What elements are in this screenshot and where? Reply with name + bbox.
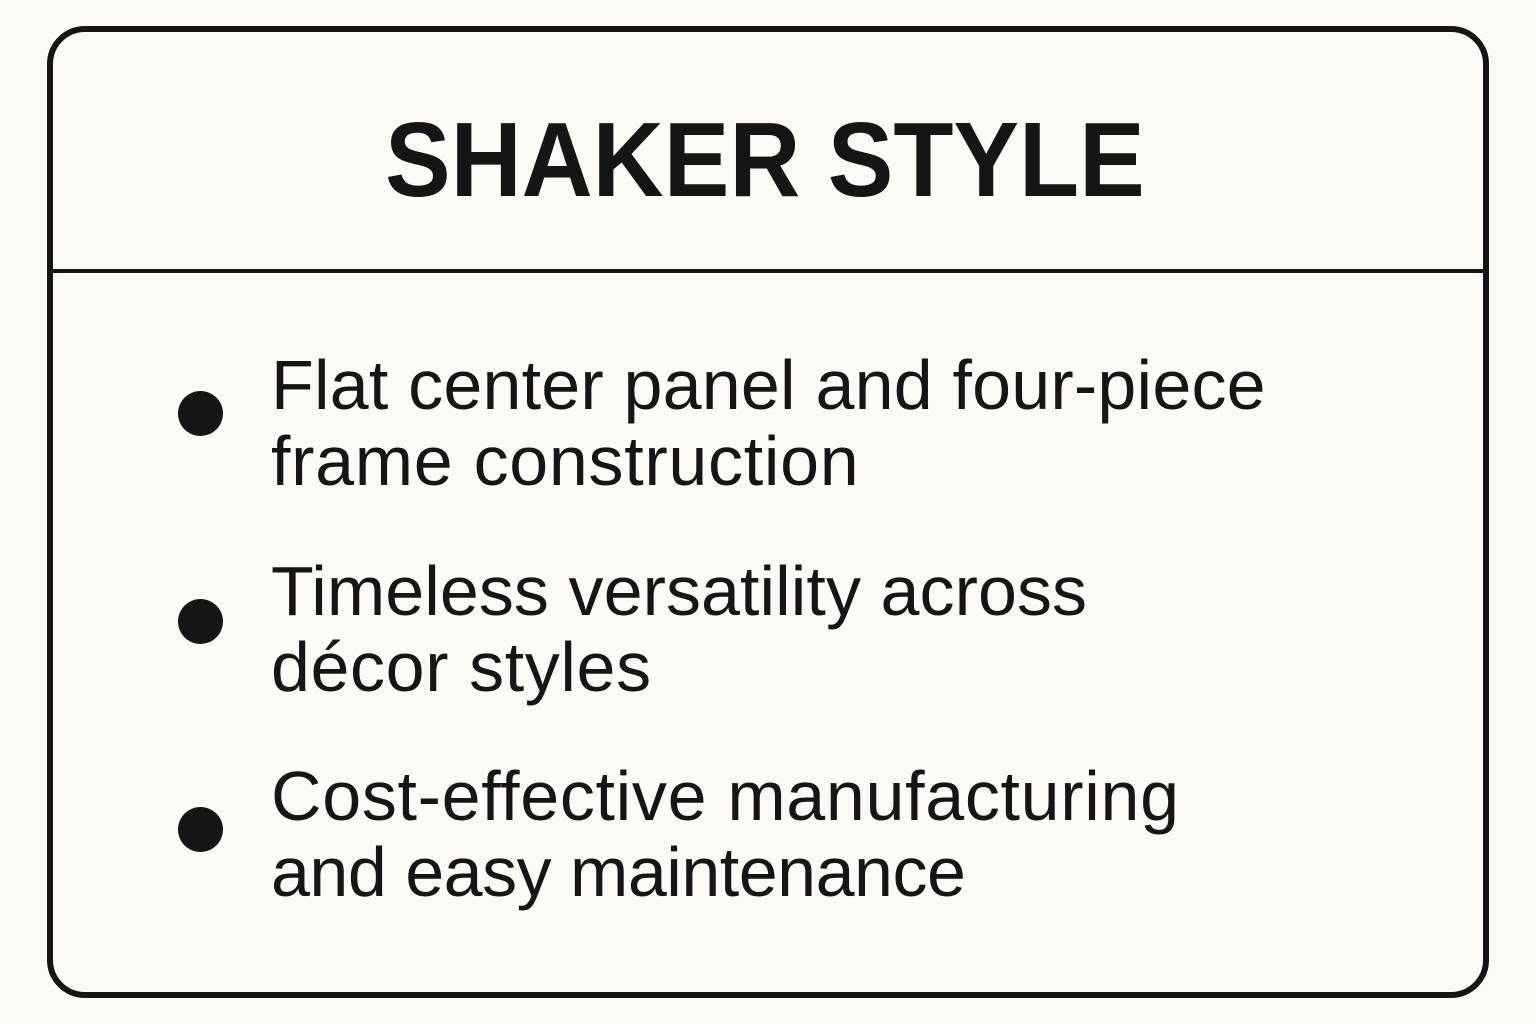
bullet 3 icon (178, 807, 223, 852)
bullet 2 text (271, 552, 1087, 706)
bullet 3 text: Cost-effective manufacturing (271, 757, 1180, 835)
bullet 3 text: and easy maintenance (271, 833, 965, 911)
bullet 2 icon (178, 599, 223, 644)
title: SHAKER STYLE (385, 101, 1145, 219)
bullet 2 text: décor styles (271, 628, 652, 706)
bullet 1 icon (178, 391, 223, 436)
bullet 1 text: Flat center panel and four-piece (271, 346, 1266, 424)
bullet 2 text: Timeless versatility across (271, 552, 1087, 630)
bullet 1 text (271, 346, 1266, 500)
header divider (50, 269, 1486, 273)
bullet 1 text: frame construction (271, 422, 859, 500)
bullet 3 text (271, 757, 1180, 911)
